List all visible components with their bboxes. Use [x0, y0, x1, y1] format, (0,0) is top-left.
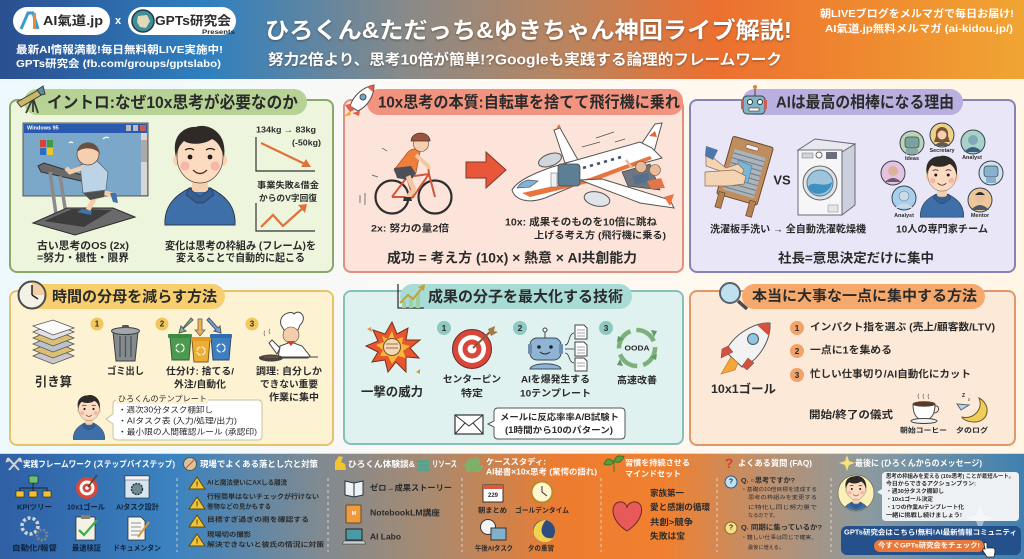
illustration: small presenter [73, 395, 105, 440]
callout: template: ひろくんのテンプレート [118, 394, 207, 404]
callout: template [106, 394, 262, 440]
heading: message: 最後に (ひろくんからのメッセージ) [855, 458, 982, 468]
heading: case study [486, 456, 597, 476]
heading: mindset: 習慣を持続させる [625, 458, 690, 468]
conclusion: 社長=意思決定だけに集中 [778, 250, 934, 266]
chart: weight loss: (-50kg) [292, 138, 321, 148]
mindset list [650, 488, 710, 541]
icon: Analyst woman [892, 186, 916, 210]
illustration: expert team: Analyst [894, 213, 914, 219]
warning list: ! [196, 502, 198, 508]
panel: time denominator [10, 282, 333, 445]
step 1: trash: ゴミ出し [107, 364, 144, 378]
step 3: chef: 3 [250, 320, 255, 328]
caption: change: 変化は思考の枠組み (フレーム)を [165, 239, 316, 252]
panel: AI partner [690, 85, 1015, 272]
section: case study [463, 456, 597, 552]
caption: old OS: 古い思考のOS (2x) [37, 239, 129, 252]
step 3: chef: できない重要 [260, 378, 318, 390]
illustration: impact explosion [366, 322, 420, 374]
call to action: 今すぐGPTs研究会をチェック! [878, 540, 980, 550]
tagline: 最新AI情報満載!毎日無料朝LIVE実施中! [16, 43, 223, 56]
step 2: AI templates: 2 [518, 323, 523, 333]
heading: numerator: 成果の分子を最大化する技術 [428, 288, 623, 306]
logo: AI気道.jp: AI氣道.jp [43, 13, 103, 28]
steps list [790, 320, 995, 382]
main title: ひろくん&ただっち&ゆきちゃん神回ライブ解説! [265, 17, 792, 43]
icon: sparkle [839, 455, 855, 471]
mindset list: 共創>競争 [650, 517, 694, 527]
label: VS: VS [773, 172, 791, 188]
caption: old OS [37, 239, 130, 264]
subtitle: 努力2倍より、思考10倍が簡単!?Googleも実践する論理的フレームワーク [268, 50, 782, 68]
caption: 10x: 上げる考え方 (飛行機に乗る) [534, 230, 666, 242]
illustration: old OS window [23, 123, 148, 196]
FAQ item 2: Q. 同期に集っているか? [741, 522, 822, 532]
icon: document [113, 517, 161, 552]
chart: weight loss [256, 126, 321, 171]
logo: GPTs研究会: GPTs研究会 [155, 13, 232, 28]
caption: change [165, 239, 316, 264]
icon: afternoon task: 午後AIタスク [475, 544, 513, 552]
caption: old OS: =努力・根性・限界 [37, 251, 130, 264]
step 3: OODA: 3 [604, 323, 609, 333]
heading: resources: ひろくん体験談& [348, 459, 415, 469]
caption: 10x [505, 216, 666, 242]
illustration: expert team [881, 123, 1003, 219]
icon: KPI tree: KPIツリー [17, 502, 52, 512]
callout: template: ・最小限の人間確認ルール (承認印) [118, 426, 257, 436]
step 2: sorting bins: 外注/自動化 [174, 378, 227, 390]
FAQ item 1: なるのです。 [748, 512, 778, 519]
heading: AI partner: AIは最高の相棒になる理由 [776, 92, 954, 112]
logo: AI気道.jp [13, 7, 110, 35]
heading: time: 時間の分母を減らす方法 [52, 288, 217, 306]
warning list [189, 477, 325, 548]
step 1: target: 特定 [461, 388, 484, 400]
warning list: 巻物などの見かもする [207, 502, 271, 510]
newsletter note [820, 7, 1014, 35]
mindset list: 失敗は宝 [650, 531, 685, 541]
heading: mindset: マインドセット [625, 470, 681, 478]
icon: calendar: 229 [488, 493, 499, 499]
illustration: rocket [711, 323, 776, 396]
speech bubble: ・週30分タスク棚卸し [886, 487, 944, 495]
chart: V-shaped recovery: 事業失敗&借金 [257, 180, 320, 190]
heading: essence [367, 89, 683, 115]
FAQ item 2: ? [729, 524, 733, 532]
call to action: GPTs研究会はこちら!無料!AI最新情報コミュニティ [844, 528, 1017, 536]
label: story: ゼロ→成果ストーリー [370, 482, 452, 492]
speech bubble: ・1つの作業AIテンプレート化 [886, 503, 964, 511]
steps list: 3 [795, 370, 800, 380]
icon: 10x1 goal [67, 475, 105, 512]
speech bubble: 思考の枠組みを変える (10x思考) ことが最短ルート。 [886, 472, 1014, 480]
label: AI Labo: AI Labo [370, 532, 401, 542]
label: subtraction: 引き算 [35, 374, 72, 389]
caption: expert team: 10人の専門家チーム [896, 222, 988, 236]
label: NotebookLM: NotebookLM講座 [370, 508, 440, 518]
heading: resources: リソース [432, 459, 457, 469]
icon: heart [613, 502, 642, 531]
caption: change: 変えることで自動的に起こる [176, 251, 305, 264]
tagline [16, 43, 223, 70]
panel: intro [10, 86, 333, 272]
icon: compass [184, 458, 196, 470]
icon: Mentor [968, 188, 992, 212]
steps list: インパクト指を選ぶ (売上/顧客数/LTV) [810, 320, 995, 334]
icon: tools [7, 458, 21, 470]
icon: moon: Z [962, 393, 965, 399]
heading: pitfalls: 現場でよくある落とし穴と対策 [200, 459, 318, 469]
chart: V-shaped recovery: からのV字回復 [259, 193, 318, 203]
caption: 2x: 2x: 努力の量2倍 [371, 222, 450, 234]
logo: GPTs研究会 [128, 7, 236, 36]
warning list: ! [196, 482, 198, 488]
illustration: old OS window: Windows 95 [27, 126, 59, 132]
heading: AI partner [742, 89, 963, 115]
icon: evening moon: 夕の重習 [528, 544, 554, 552]
logo: GPTs研究会: Presents [202, 30, 236, 36]
heading: FAQ: よくある質問 (FAQ) [738, 458, 812, 468]
speech bubble: ・10x1ゴール決定 [886, 495, 933, 503]
callout: template: ・AIタスク表 (入力/処理/出力) [118, 416, 237, 426]
step 2: AI templates: 10テンプレート [520, 388, 591, 400]
FAQ item 1: 思考の枠組みを変更する [748, 494, 817, 501]
icon: telescope [17, 86, 45, 113]
callout: email test: メールに反応率率A/B試験ト [500, 411, 619, 422]
heading: focus [742, 284, 985, 309]
label: rituals: 開始/終了の儀式 [809, 408, 894, 421]
warning list: ! [196, 520, 198, 526]
step 1: trash [90, 318, 144, 378]
header band [0, 0, 1024, 79]
warning list: ! [196, 538, 198, 546]
icon: AI task design [116, 476, 159, 512]
FAQ item 1: ・基礎の10倍目標を達成する [741, 486, 817, 493]
section: mindset [604, 456, 710, 541]
FAQ item 2: 最後に増える。 [748, 544, 784, 551]
icon: coffee: 朝始コーヒー [900, 426, 947, 434]
icon: automation gears: 自動化/報督 [12, 542, 58, 552]
heading: framework: 実践フレームワーク (ステップバイステップ) [23, 459, 175, 469]
label: power: 一撃の威力 [361, 384, 423, 399]
heading: mindset [625, 458, 690, 478]
icon: growth chart [398, 284, 425, 308]
steps list: 2 [795, 346, 800, 356]
formula: 成功 = 考え方 (10x) × 熱意 × AI共創能力 [387, 250, 637, 266]
FAQ item 1: Q. ○思考ですか? [741, 476, 795, 484]
FAQ item 1: ? [729, 478, 733, 486]
newsletter note: 朝LIVEブログをメルマガで毎日お届け! [820, 7, 1014, 20]
icon: golden time clock: ゴールデンタイム [515, 506, 569, 514]
illustration: presenter [165, 126, 235, 225]
icon: calendar: 朝まとめ [478, 506, 507, 514]
illustration: expert team: Mentor [971, 213, 990, 219]
step 3: OODA: 高速改善 [617, 374, 658, 386]
illustration: washing machine [798, 139, 855, 215]
mindset list: 愛と感謝の循環 [650, 502, 710, 512]
icon: 10x1 goal: 10x1ゴール [67, 502, 105, 512]
icon: moon: 夕のログ [956, 426, 988, 434]
icon: automation gears [12, 518, 58, 552]
illustration: treadmill runner [33, 137, 135, 235]
heading: essence: 10x思考の本質:自転車を捨てて飛行機に乗れ [378, 92, 680, 112]
warning list: 行程簡単はないチェックが行けない [207, 492, 320, 500]
heading: time [22, 284, 225, 309]
icon: rocket [343, 85, 374, 117]
speech bubble: 一緒に挑戦し続けましょう! [886, 511, 962, 519]
warning list: 現場切の撮影 [207, 530, 252, 538]
heading: numerator [400, 284, 632, 309]
step 2: sorting bins: 仕分け: 捨てる/ [166, 366, 234, 378]
icon: laptop [342, 529, 366, 544]
FAQ item 1: に特化し同じ努力量で [748, 504, 817, 511]
icon: Ideas robot [900, 131, 924, 155]
step 2: sorting bins: 2 [160, 320, 165, 328]
heading: case study: AI秘書×10x思考 (驚愕の語れ) [486, 466, 597, 476]
icon: open book [345, 481, 363, 497]
icon: muscle [335, 456, 346, 470]
step 1: target: 1 [442, 323, 447, 333]
icon: clock [18, 282, 46, 308]
callout: template: ・週次30分タスク棚卸し [118, 404, 213, 414]
panel: focus [690, 283, 1015, 445]
arrow: bicycle to airplane [466, 152, 506, 188]
icon: question mark: ? [725, 455, 733, 471]
tagline: GPTs研究会 (fb.com/groups/gptslabo) [16, 57, 221, 70]
icon: magnifier [720, 283, 747, 309]
FAQ item 1 [725, 476, 817, 519]
icon: Analyst [961, 130, 985, 154]
step 1: target [437, 321, 501, 400]
FAQ item 2: ・難しい仕事は同じで確実、 [741, 534, 817, 541]
step 3: OODA: OODA [624, 344, 650, 352]
icon: document: ドキュメンタン [113, 542, 161, 552]
illustration: paper stack [33, 320, 74, 364]
step 3: chef: 作業に集中 [269, 392, 319, 404]
speech bubble: 今日からできるアクションプラン: [886, 480, 976, 488]
panel: numerator [344, 284, 683, 444]
step 1: trash: 1 [95, 320, 100, 328]
icon: robot [741, 85, 767, 114]
call to action [841, 526, 1021, 555]
illustration: washboard [705, 136, 773, 218]
section: FAQ [725, 455, 822, 551]
FAQ item 2 [725, 522, 822, 551]
section: practical framework [7, 458, 175, 552]
icon: sprout [604, 456, 624, 472]
step 3: OODA [599, 321, 658, 386]
mindset list: 家族第一 [650, 488, 684, 498]
illustration: expert team: Secretary [929, 148, 955, 154]
section: final message [838, 455, 1021, 557]
chart: weight loss: 134kg → 83kg [256, 126, 316, 134]
heading: intro [24, 89, 307, 115]
icon: clipboard check: 最速検証 [72, 542, 101, 552]
icon: moon: z [968, 396, 970, 402]
caption: 10x: 10x: 成果そのものを10倍に跳ね [505, 216, 657, 228]
warning list: 解決できないと彼氏の情況に対策 [207, 540, 325, 548]
step 2: AI templates [513, 321, 591, 400]
cross mark: x [115, 15, 122, 27]
illustration: cyclist [360, 133, 452, 214]
step 2: sorting bins [156, 318, 234, 390]
step 3: chef: 調理: 自分しか [256, 366, 323, 378]
icon: envelope [455, 415, 483, 434]
section: experience and resources [335, 456, 457, 544]
steps list: 一点に1を集める [810, 344, 892, 356]
heading: intro: イントロ:なぜ10x思考が必要なのか [47, 92, 298, 112]
illustration: rocket: 10x1ゴール [711, 381, 776, 396]
chart: V-shaped recovery [256, 180, 320, 231]
glow [966, 505, 994, 531]
icon: Secretary [930, 123, 954, 147]
steps list: 忙しい仕事切り/AI自動化にカット [810, 368, 971, 380]
icon: pointer hand [983, 542, 995, 557]
footer band [0, 453, 1024, 559]
heading: case study: ケーススタディ: [486, 456, 546, 466]
illustration: expert team: Analyst [962, 155, 982, 161]
warning list: AIと魔法使いにAXしる離流 [207, 478, 287, 486]
icon: senior advisor [881, 161, 905, 185]
warning list: 目標すぎ過ぎの雨を確認する [207, 514, 309, 524]
section: pitfalls [184, 458, 325, 548]
speech bubble [877, 472, 1019, 521]
icon: KPI tree [16, 476, 52, 512]
newsletter note: AI氣道.jp無料メルマガ (ai-kidou.jp/) [825, 22, 1013, 35]
heading: focus: 本当に大事な一点に集中する方法 [752, 287, 978, 305]
step 2: AI templates: AIを爆発生する [521, 374, 590, 386]
step 3: chef [246, 312, 323, 404]
panel: essence of 10x [343, 85, 683, 272]
caption: washboard to dryer: 洗濯板手洗い → 全自動洗濯乾燥機 [710, 222, 866, 236]
icon: calendar [478, 485, 507, 514]
callout: email test: (1時間から10のパターン) [505, 424, 613, 435]
step 1: target: センターピン [443, 374, 501, 386]
icon: moon [956, 393, 988, 434]
icon: robot helper [979, 161, 1003, 185]
icon: AI task design: AIタスク設計 [116, 502, 159, 512]
illustration: airplane [512, 123, 674, 209]
heading: resources [348, 459, 457, 471]
icon: notebook: M [352, 511, 356, 517]
icon: puzzle [463, 456, 483, 472]
icon: clipboard check [72, 515, 101, 552]
illustration: CEO at center [920, 156, 964, 217]
icon: coffee [900, 394, 947, 434]
steps list: 1 [795, 323, 800, 333]
callout: email test [488, 408, 625, 439]
illustration: expert team: Ideas [905, 156, 919, 162]
portrait: Hiro-kun [838, 474, 874, 512]
